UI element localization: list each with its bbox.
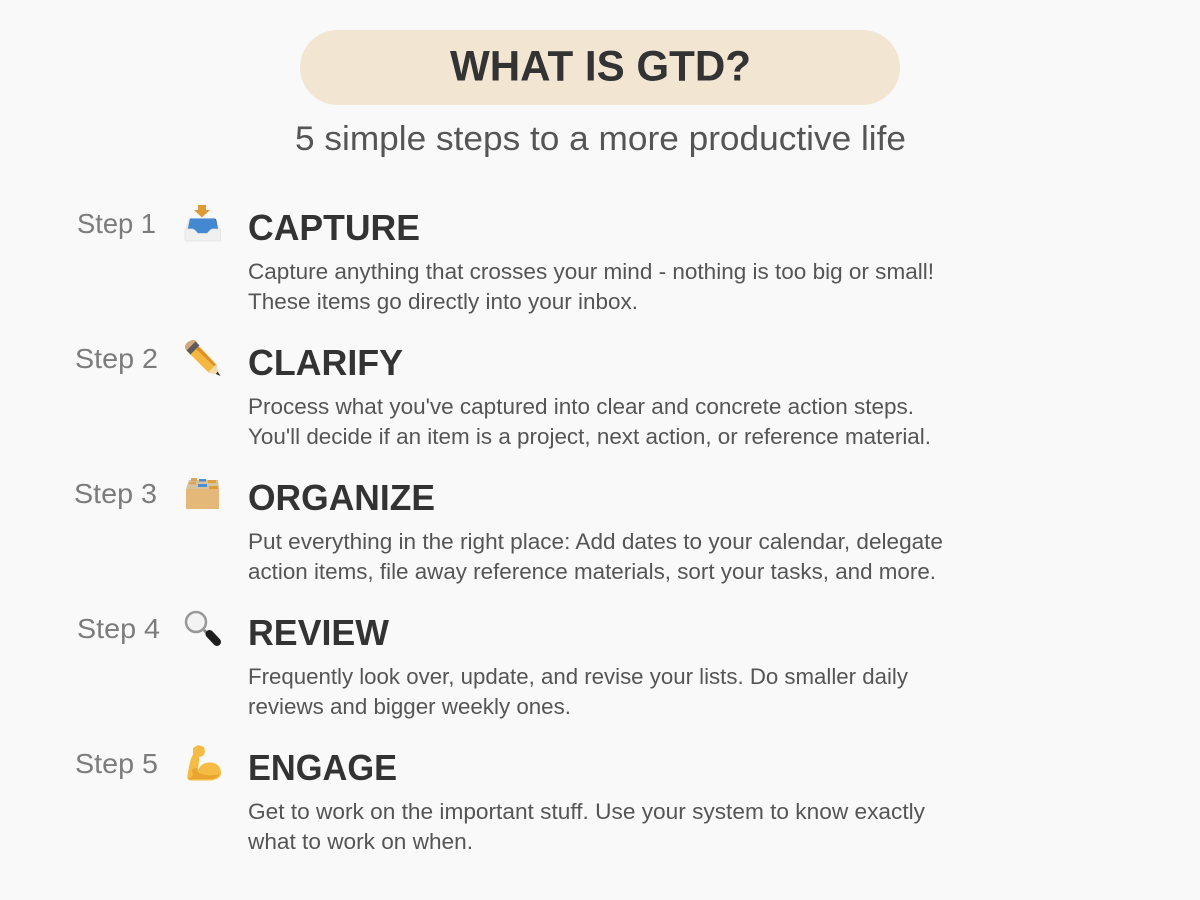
engage description: what to work on when. <box>247 829 473 854</box>
step 4: review <box>77 612 908 719</box>
organize description: action items, file away reference materials, sort your tasks, and more. <box>248 559 936 584</box>
review description: reviews and bigger weekly ones. <box>248 694 571 719</box>
clarify description: Process what you've captured into clear and concrete action steps. <box>248 394 914 419</box>
capture heading: CAPTURE <box>248 207 420 248</box>
title pill <box>300 30 900 105</box>
icon: card file box <box>186 478 219 509</box>
step 2 label: Step 2 <box>75 343 158 374</box>
step 3 label: Step 3 <box>74 478 157 509</box>
capture description: Capture anything that crosses your mind - nothing is too big or small! <box>248 259 934 284</box>
step 1: capture <box>77 205 934 314</box>
capture description <box>248 259 934 314</box>
title pill: WHAT IS GTD? <box>450 42 751 90</box>
step 5 label: Step 5 <box>75 748 158 779</box>
step 1 label: Step 1 <box>77 208 156 239</box>
clarify heading: CLARIFY <box>248 342 403 383</box>
icon: flexed biceps <box>187 745 221 780</box>
clarify description: You'll decide if an item is a project, next action, or reference material. <box>248 424 931 449</box>
clarify description <box>248 394 931 449</box>
review heading: REVIEW <box>248 612 389 653</box>
organize description <box>248 529 943 584</box>
organize heading: ORGANIZE <box>248 477 435 518</box>
engage description: Get to work on the important stuff. Use your system to know exactly <box>248 799 925 824</box>
icon: magnifying glass <box>186 612 217 642</box>
capture description: These items go directly into your inbox. <box>248 289 638 314</box>
step 2: clarify <box>75 340 931 449</box>
step 5: engage <box>75 745 925 854</box>
icon: pencil <box>185 340 220 376</box>
icon: inbox tray <box>185 205 220 241</box>
step 4 label: Step 4 <box>77 613 160 644</box>
engage heading: ENGAGE <box>248 747 397 788</box>
engage description <box>247 799 925 854</box>
step 3: organize <box>74 477 943 584</box>
review description <box>248 664 908 719</box>
subtitle: 5 simple steps to a more productive life <box>295 120 906 158</box>
organize description: Put everything in the right place: Add dates to your calendar, delegate <box>248 529 943 554</box>
review description: Frequently look over, update, and revise your lists. Do smaller daily <box>248 664 908 689</box>
